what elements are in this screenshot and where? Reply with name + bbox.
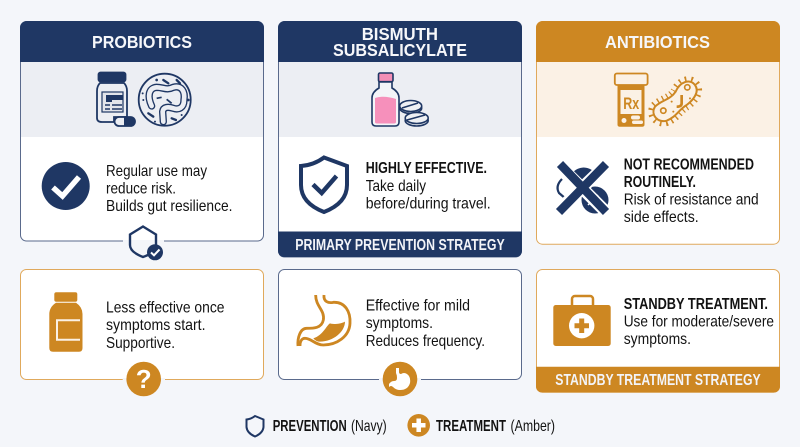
text: bismuth effectiveness: Take daily (366, 178, 426, 195)
text: antibiotics treatment: STANDBY TREATMENT. (624, 296, 768, 313)
text: antibiotics prevention (624, 157, 759, 226)
text: bismuth treatment: Reduces frequency. (366, 333, 485, 350)
icon: shield with check (301, 158, 347, 212)
icon: stomach badge (379, 362, 421, 396)
text: probiotics treatment (106, 300, 225, 352)
icon: crossed out pills (558, 164, 608, 214)
text: probiotics prevention (106, 163, 232, 215)
header: bismuth subsalicylate (278, 21, 522, 62)
header: probiotics (20, 21, 264, 62)
legend item: prevention (246, 416, 387, 436)
header: bismuth subsalicylate: BISMUTH (362, 24, 438, 44)
legend item: treatment (407, 414, 555, 437)
text: probiotics prevention: reduce risk. (106, 180, 176, 198)
text: bismuth treatment: symptoms. (366, 315, 433, 332)
icon: pink bottle and tablets (372, 73, 428, 126)
panel: antibiotics prevention (536, 21, 780, 244)
legend item: treatment: (Amber) (510, 418, 555, 435)
text: probiotics prevention: Regular use may (106, 163, 207, 180)
text: bismuth treatment (366, 298, 485, 350)
text: antibiotics prevention: side effects. (624, 209, 699, 226)
panel: probiotics treatment (20, 270, 264, 396)
text: bismuth effectiveness (366, 160, 491, 213)
text: antibiotics prevention: ROUTINELY. (624, 174, 696, 191)
text: bismuth effectiveness: before/during travel. (366, 196, 491, 213)
legend (246, 414, 555, 437)
panel: bismuth subsalicylate prevention (278, 21, 522, 257)
text: antibiotics prevention: Risk of resistance and (624, 192, 759, 208)
panel: bismuth treatment (278, 270, 522, 396)
icon: medical case (553, 296, 611, 346)
banner: primary prevention strategy (278, 232, 522, 257)
icon: shield badge (123, 226, 164, 260)
banner: standby treatment strategy (536, 367, 780, 392)
icon: prescription bottle (615, 74, 648, 127)
panel: antibiotics treatment (536, 270, 780, 392)
text: probiotics treatment: symptoms start. (106, 317, 206, 334)
text: antibiotics prevention: NOT RECOMMENDED (624, 157, 754, 174)
text: bismuth treatment: Effective for mild (366, 298, 470, 315)
icon: prescription bottle: Rx (623, 94, 640, 113)
header: antibiotics: ANTIBIOTICS (605, 32, 710, 52)
text: antibiotics treatment (624, 296, 774, 348)
text: bismuth effectiveness: HIGHLY EFFECTIVE. (366, 160, 487, 177)
text: probiotics treatment: Less effective once (106, 300, 225, 317)
text: probiotics prevention: Builds gut resilience. (106, 198, 232, 215)
panel: probiotics prevention (20, 21, 264, 260)
header: bismuth subsalicylate: SUBSALICYLATE (333, 40, 467, 60)
icon: question badge (123, 362, 165, 396)
text: probiotics treatment: Supportive. (106, 335, 175, 352)
icon: stomach (298, 295, 350, 346)
text: antibiotics treatment: symptoms. (624, 331, 691, 348)
icon: question badge: ? (136, 364, 152, 394)
header: probiotics: PROBIOTICS (92, 32, 192, 52)
header: antibiotics (536, 21, 780, 62)
legend item: treatment: TREATMENT (436, 418, 506, 435)
legend item: prevention: (Navy) (351, 418, 387, 435)
banner: primary prevention strategy: PRIMARY PREVENTION STRATEGY (295, 237, 505, 254)
text: antibiotics treatment: Use for moderate/severe (624, 314, 774, 331)
legend item: prevention: PREVENTION (273, 418, 347, 435)
icon: bacterium (653, 82, 697, 121)
icon: probiotic bottle and gut (97, 72, 191, 126)
icon: check circle (42, 162, 90, 210)
icon: amber bottle (49, 292, 82, 352)
